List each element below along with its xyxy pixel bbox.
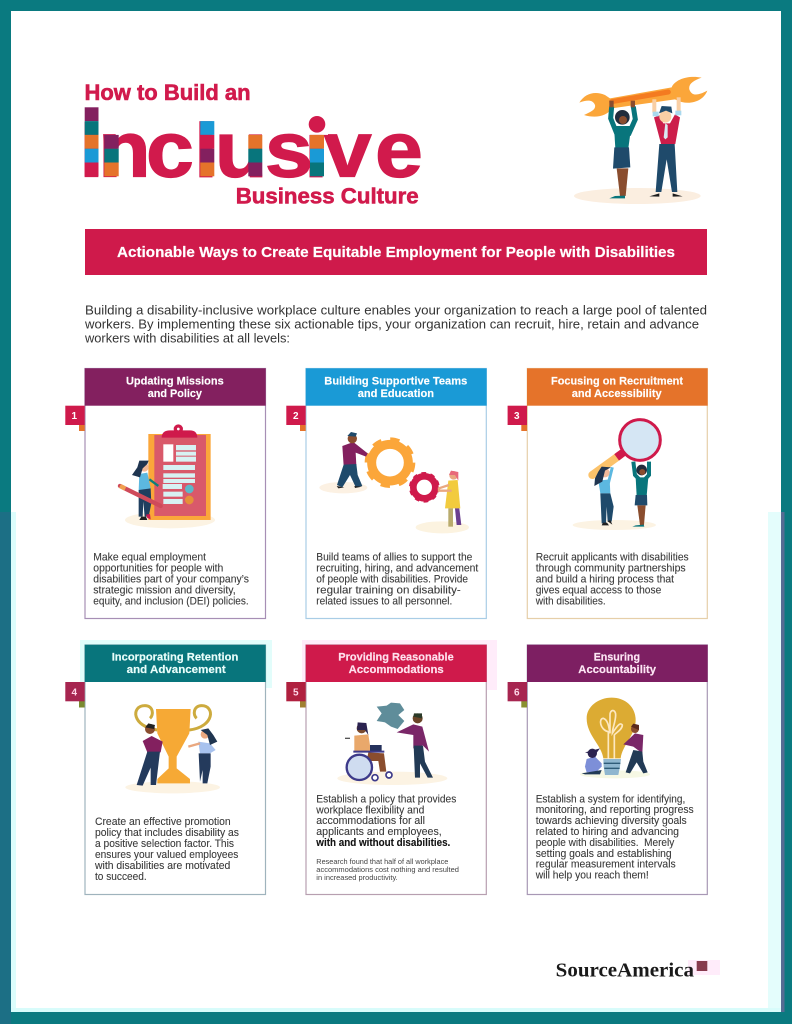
card 2 header: Building Supportive Teams — [324, 376, 467, 388]
card 5 body text: workplace flexibility and — [315, 804, 424, 816]
card 3 body text: gives equal access to those — [536, 585, 661, 597]
card 4 number badge: 4 — [72, 688, 78, 698]
card 5 body text: Establish a policy that provides — [316, 793, 457, 805]
banner: Actionable Ways to Create Equitable Employment for People with Disabilities — [117, 245, 675, 261]
card 3 header: and Accessibility — [572, 388, 662, 400]
icon: two women holding a magnifying glass — [573, 420, 660, 530]
card 6 body text: monitoring, and reporting progress — [536, 804, 694, 816]
intro paragraph: workers with disabilities at all levels: — [84, 330, 290, 346]
card 2 number badge: 2 — [293, 411, 299, 422]
card 3 body text: through community partnerships — [536, 563, 686, 575]
card 2 body text: Build teams of allies to support the — [316, 552, 472, 564]
icon: light bulb with two people — [580, 698, 650, 778]
card 1 body text: disabilities part of your company’s — [93, 574, 250, 586]
card 4 body text: with disabilities are motivated — [94, 860, 230, 872]
card 6 header: Ensuring — [594, 652, 640, 664]
card 4 body text — [94, 816, 240, 883]
card 4 header: Incorporating Retention — [112, 652, 238, 664]
icon: wheelchair user and man with puzzle piece — [337, 703, 447, 785]
card 6 header: Accountability — [578, 664, 657, 676]
card 5 header: Providing Reasonable — [338, 652, 454, 664]
card 4 body text: policy that includes disability as — [95, 827, 240, 839]
card 3 body text: with disabilities. — [535, 596, 606, 608]
card 2 body text — [316, 552, 478, 608]
banner — [85, 229, 707, 275]
card 1 number badge — [65, 406, 85, 431]
logo: SourceAmerica: SourceAmerica — [556, 961, 694, 982]
card 6 number badge — [508, 682, 527, 708]
panel: card 4 Incorporating Retention and Advancement — [65, 640, 272, 894]
title word: Inclusive: Inclusive — [80, 105, 423, 194]
card 3 body text — [535, 552, 689, 608]
card 2 header: and Education — [358, 388, 434, 400]
panel: card 2 Building Supportive Teams and Education — [286, 368, 487, 618]
card 4 header: and Advancement — [127, 664, 226, 676]
card 4 header — [85, 645, 266, 682]
card 5 research note: in increased productivity. — [316, 873, 398, 882]
card 3 body text: Recruit applicants with disabilities — [536, 552, 689, 564]
icon: two people turning gears — [319, 432, 469, 533]
card 4 number badge — [65, 682, 85, 708]
card 1 body text: equity, and inclusion (DEI) policies. — [93, 596, 249, 608]
card 5 header: Accommodations — [349, 664, 444, 676]
card 3 number badge: 3 — [514, 411, 520, 422]
card 1 body text — [93, 552, 250, 608]
card 6 body text: people with disabilities. Merely — [536, 837, 675, 849]
panel: card 6 Ensuring Accountability — [508, 645, 708, 894]
card 5 research note: accommodations cost nothing and resulted — [316, 865, 459, 874]
card 5 header — [306, 645, 487, 682]
card 1 header — [85, 368, 266, 406]
card 2 header — [306, 368, 487, 406]
card 3 header: Focusing on Recruitment — [551, 376, 683, 388]
panel: card 3 Focusing on Recruitment and Accessibility — [508, 368, 708, 618]
card 6 body text: setting goals and establishing — [536, 848, 672, 860]
card 4 body text: ensures your valued employees — [95, 849, 239, 861]
card 2 number badge — [286, 406, 306, 431]
card 6 body text: will help you reach them! — [535, 870, 649, 882]
card 2 body text: recruiting, hiring, and advancement — [316, 563, 478, 575]
card 3 body text: and build a hiring process that — [536, 574, 674, 586]
card 1 body text: opportunities for people with — [93, 563, 223, 575]
card 6 header — [527, 645, 708, 682]
card 2 body text: of people with disabilities. Provide — [316, 574, 468, 586]
card 5 body text: applicants and employees, — [316, 826, 442, 838]
card 5 research note: Research found that half of all workplace — [316, 857, 448, 866]
card 2 body text: related issues to all personnel. — [316, 596, 452, 608]
card 6 body text: regular measurement intervals — [536, 859, 676, 871]
card 4 body text: a positive selection factor. This — [95, 838, 235, 850]
card 5 body text: accommodations for all — [316, 815, 425, 827]
card 5 number badge: 5 — [293, 688, 299, 698]
card 6 number badge: 6 — [514, 688, 520, 698]
card 3 number badge — [508, 406, 527, 431]
card 4 body text: Create an effective promotion — [95, 816, 231, 828]
card 5 research note — [316, 857, 459, 882]
title line: How to Build an: How to Build an — [84, 80, 250, 105]
intro paragraph: Building a disability-inclusive workplace culture enables your organization to reach a large pool of talented — [85, 302, 707, 318]
panel: card 5 Providing Reasonable Accommodations — [286, 640, 497, 894]
panel: card 1 Updating Missions and Policy — [65, 368, 266, 618]
title line: Business Culture: Business Culture — [236, 183, 419, 208]
card 1 header: and Policy — [148, 388, 203, 400]
card 5 number badge — [286, 682, 306, 708]
intro paragraph — [84, 302, 707, 346]
card 2 body text: regular training on disability- — [316, 585, 461, 597]
card 4 body text: to succeed. — [95, 871, 147, 883]
card 5 body text — [315, 793, 457, 849]
card 6 body text: towards achieving diversity goals — [536, 815, 687, 827]
card 5 body text: with and without disabilities. — [315, 837, 450, 849]
card 3 header — [527, 368, 708, 406]
card 1 body text: strategic mission and diversity, — [93, 585, 236, 597]
icon: two people with a trophy — [125, 706, 220, 793]
card 1 body text: Make equal employment — [93, 552, 206, 564]
card 1 header: Updating Missions — [126, 376, 224, 388]
card 6 body text — [535, 793, 694, 882]
illustration: two people lifting a wrench — [574, 77, 707, 204]
intro paragraph: workers. By implementing these six actionable tips, your organization can recruit, hire, retain and advance — [84, 316, 699, 332]
card 1 number badge: 1 — [72, 411, 78, 422]
title — [80, 80, 423, 208]
icon: clipboard and woman with pencil — [120, 424, 215, 528]
card 6 body text: related to hiring and advancing — [536, 826, 679, 838]
card 6 body text: Establish a system for identifying, — [536, 793, 685, 805]
